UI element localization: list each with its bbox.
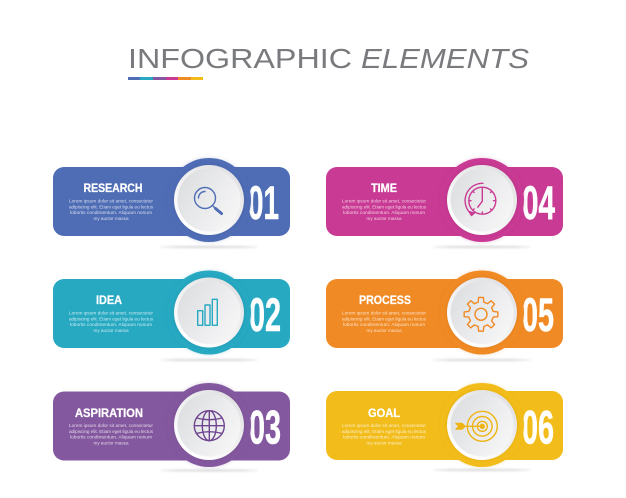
text block: idea: my auctor massa: [94, 328, 129, 334]
circle badge: time: [439, 157, 525, 243]
heading: idea: IDEA: [96, 295, 122, 307]
heading: time: TIME: [371, 183, 397, 195]
title underline colour bar: [128, 77, 203, 80]
text block: research: adipiscing elit. Etiam eget ligula eu lectus: [69, 204, 154, 210]
panel: idea: [53, 270, 290, 361]
icon: bar chart: [198, 299, 217, 325]
heading: research: RESEARCH: [84, 183, 142, 195]
panel: goal: [326, 382, 563, 471]
circle badge: idea: [166, 270, 252, 356]
text block: time: lobortis condimentum. Aliquam nonum: [343, 210, 425, 216]
panel: process: [326, 270, 563, 361]
number: 05: 05: [522, 288, 554, 341]
title: [128, 43, 529, 74]
text block: goal: Lorem ipsum dolor sit amet, consectetur: [342, 423, 426, 429]
text block: process: my auctor massa: [366, 328, 402, 334]
text block: process: [342, 310, 427, 334]
text block: goal: adipiscing elit. Etiam eget ligula eu lectus: [342, 429, 427, 435]
text block: research: [69, 198, 154, 222]
text block: idea: [69, 310, 154, 334]
text block: idea: Lorem ipsum dolor sit amet, consectetur: [69, 310, 153, 316]
number: 03: 03: [249, 400, 281, 454]
text block: time: [342, 198, 427, 222]
icon: gear: [464, 297, 498, 331]
text block: time: Lorem ipsum dolor sit amet, consectetur: [342, 198, 426, 204]
icon: globe: [194, 411, 224, 441]
number: 01: 01: [248, 176, 279, 229]
title: ELEMENTS: [361, 43, 529, 74]
heading: goal: GOAL: [368, 408, 400, 420]
text block: aspiration: [69, 423, 154, 446]
text block: process: adipiscing elit. Etiam eget ligula eu lectus: [342, 316, 427, 322]
text block: time: adipiscing elit. Etiam eget ligula eu lectus: [342, 204, 427, 210]
text block: process: lobortis condimentum. Aliquam nonum: [343, 322, 425, 328]
text block: goal: [342, 423, 427, 446]
title: INFOGRAPHIC: [128, 43, 352, 74]
circle badge: research: [166, 157, 252, 243]
text block: aspiration: adipiscing elit. Etiam eget ligula eu lectus: [69, 429, 154, 435]
circle badge: goal: [439, 382, 525, 468]
text block: aspiration: my auctor massa: [94, 440, 129, 446]
text block: idea: adipiscing elit. Etiam eget ligula eu lectus: [69, 316, 154, 322]
icon: magnifier: [194, 188, 222, 214]
text block: research: Lorem ipsum dolor sit amet, consectetur: [69, 198, 153, 204]
text block: process: Lorem ipsum dolor sit amet, consectetur: [342, 310, 426, 316]
circle badge: aspiration: [166, 382, 252, 468]
icon: clock: [465, 183, 496, 216]
text block: research: my auctor massa: [94, 216, 129, 222]
number: 02: 02: [249, 288, 281, 341]
number: 04: 04: [522, 176, 555, 229]
text block: idea: lobortis condimentum. Aliquam nonum: [70, 322, 152, 328]
number: 06: 06: [522, 400, 554, 454]
text block: aspiration: lobortis condimentum. Aliquam nonum: [70, 434, 152, 440]
text block: time: my auctor massa: [366, 216, 402, 222]
icon: target: [456, 411, 497, 441]
heading: process: PROCESS: [359, 295, 411, 307]
text block: aspiration: Lorem ipsum dolor sit amet, consectetur: [69, 423, 153, 429]
panel: time: [326, 157, 563, 248]
circle badge: process: [439, 270, 525, 356]
panel: research: [53, 157, 290, 248]
heading: aspiration: ASPIRATION: [75, 408, 143, 420]
text block: goal: lobortis condimentum. Aliquam nonum: [343, 434, 425, 440]
text block: research: lobortis condimentum. Aliquam nonum: [70, 210, 152, 216]
text block: goal: my auctor massa: [366, 440, 402, 446]
panel: aspiration: [53, 382, 290, 472]
